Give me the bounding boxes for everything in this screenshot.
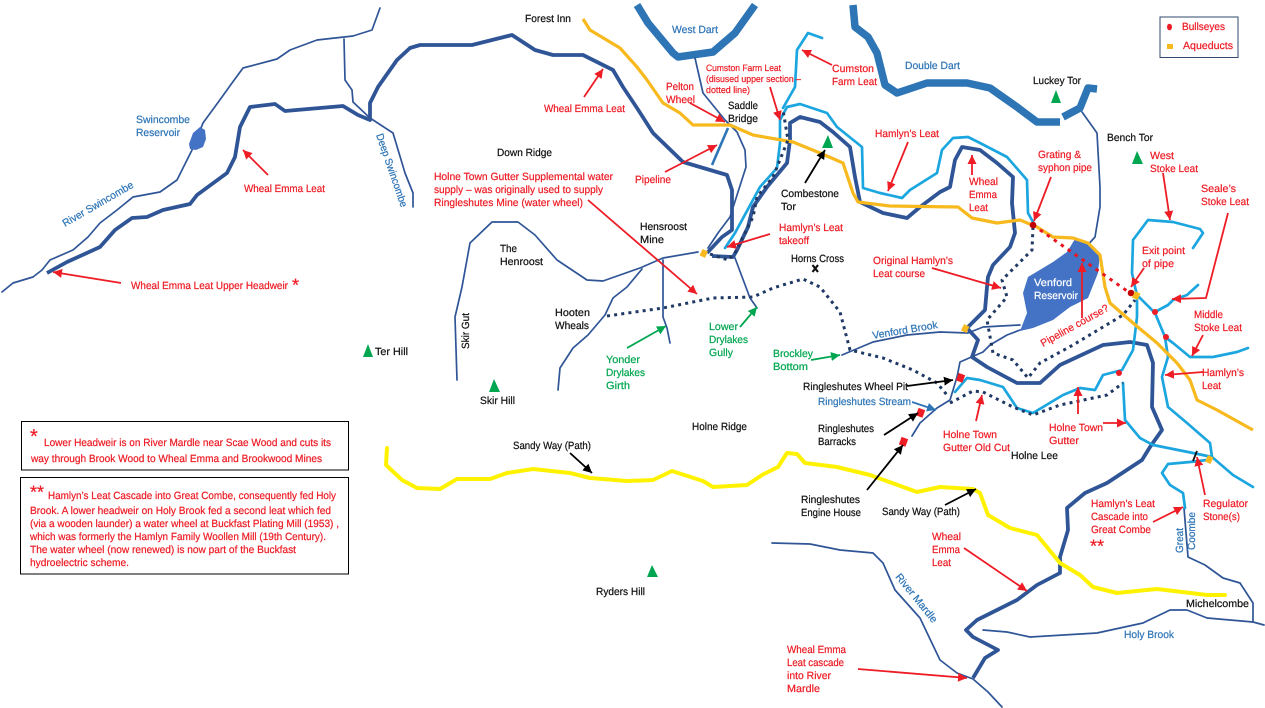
label: Hamlyn's Leat Cascade into Great Combe: Cascade into bbox=[1091, 511, 1148, 523]
label: Brockley Bottom: Bottom bbox=[773, 361, 808, 373]
dotted: Cumston Farm Leat disused bbox=[710, 110, 788, 260]
arrow: Cascade Great Combe bbox=[1153, 507, 1183, 522]
arrow: Sandy Way east bbox=[945, 489, 976, 505]
label: Holy Brook: Holy Brook bbox=[1124, 629, 1175, 641]
label: Swincombe Reservoir bbox=[136, 114, 190, 139]
label: Great Coombe: Great bbox=[1174, 528, 1186, 553]
note box: Hamlyn's Leat cascade: (via a wooden launder) a water wheel at Buckfast Plating Mill (1953) , bbox=[30, 518, 339, 530]
hill marker: Bench Tor bbox=[1132, 151, 1143, 164]
label: West Stoke Leat: Stoke Leat bbox=[1150, 163, 1198, 175]
label: Bench Tor: Bench Tor bbox=[1107, 132, 1153, 144]
stream: Ringleshutes Stream bbox=[912, 330, 1020, 436]
label: Exit point of pipe: of pipe bbox=[1142, 258, 1174, 270]
label: Holne Town Gutter Old Cut: Holne Town bbox=[943, 429, 997, 441]
label: Great Coombe bbox=[1174, 512, 1198, 553]
arrow: Sandy Way west bbox=[570, 453, 592, 473]
label: Hamlyn's Leat Cascade into Great Combe: Hamlyn’s Leat bbox=[1091, 498, 1155, 510]
label: Venford Reservoir bbox=[1034, 277, 1078, 302]
stream: Venford Brook bbox=[842, 325, 1020, 355]
dotted: Holne Town Gutter supplemental supply bbox=[607, 279, 947, 395]
stream: River Mardle bbox=[772, 543, 1002, 707]
arrow: Hamlyn's takeoff bbox=[727, 234, 770, 247]
label: Combestone Tor: Tor bbox=[781, 201, 797, 213]
label: Wheal Emma Leat south: Leat bbox=[932, 557, 951, 569]
label: Holne Ridge: Holne Ridge bbox=[692, 421, 747, 433]
arrow: Old Cut bbox=[976, 395, 982, 421]
bullseye: Seale's bbox=[1152, 309, 1158, 315]
aqueduct: regulator bbox=[1205, 455, 1213, 464]
stream: Lower Drylakes Gully bbox=[735, 258, 757, 308]
label: Luckey Tor: Luckey Tor bbox=[1033, 75, 1081, 87]
label: Yonder Drylakes Girth bbox=[606, 354, 645, 392]
label: Ringleshutes Engine House bbox=[801, 494, 861, 519]
label: Wheal Emma Leat centre bbox=[969, 176, 998, 214]
aqueduct line bbox=[583, 19, 1253, 430]
label: Wheal Emma Leat south bbox=[932, 531, 961, 569]
arrow: Cascade River Mardle bbox=[858, 669, 967, 678]
label: Venford Reservoir: Reservoir bbox=[1034, 290, 1078, 302]
arrow: Holne Town Gutter Supplemental bbox=[588, 200, 697, 294]
label: Swincombe Reservoir: Reservoir bbox=[136, 127, 180, 139]
label: Saddle Bridge: Saddle bbox=[728, 100, 758, 112]
label: Hamlyn's Leat takeoff: Hamlyn’s Leat bbox=[779, 222, 843, 234]
label: Wheal Emma Leat Upper Headweir: * bbox=[292, 275, 299, 295]
label: Wheal Emma Leat cascade into River Mardle: Wheal Emma bbox=[787, 644, 846, 656]
hill marker: Skir Hill bbox=[489, 379, 500, 392]
label: Saddle Bridge bbox=[728, 100, 758, 125]
label: Ter Hill: Ter Hill bbox=[375, 346, 408, 358]
reservoir: Venford Reservoir bbox=[1020, 239, 1100, 331]
river: West Dart bbox=[637, 5, 755, 57]
pipeline to Pelton Wheel bbox=[712, 128, 728, 165]
label: Middle Stoke Leat bbox=[1194, 309, 1242, 334]
label: Cumston Farm Leat disused: Cumston Farm Leat bbox=[706, 63, 781, 73]
stream: Yonder Drylakes Girth bbox=[663, 260, 670, 343]
leat: Hamlyn's Leat cascade bbox=[1162, 460, 1207, 508]
label: Ringleshutes Barracks: Ringleshutes bbox=[818, 423, 874, 435]
label: Holne Town Gutter Supplemental: Ringleshutes Mine (water wheel) bbox=[434, 197, 583, 209]
label: Holne Town Gutter: Gutter bbox=[1049, 435, 1080, 447]
arrow: Hamlyn's Leat east bbox=[1165, 372, 1203, 375]
leat: West Stoke Leat bbox=[1132, 220, 1203, 295]
note box: Hamlyn's Leat cascade: The water wheel (now renewed) is now part of the Buckfast bbox=[30, 544, 296, 556]
label: Venford Reservoir: Venford bbox=[1034, 277, 1072, 289]
label: Ringleshutes Stream: Ringleshutes Stream bbox=[818, 396, 911, 408]
label: The Henroost bbox=[500, 243, 543, 268]
arrow: Lower Drylakes bbox=[740, 307, 757, 327]
label: Cumston Farm Leat: Farm Leat bbox=[832, 76, 877, 88]
hill marker: Luckey Tor bbox=[1051, 90, 1061, 103]
arrow: Wheal Emma Leat south bbox=[964, 548, 1027, 591]
bullseye: grating bbox=[1030, 222, 1036, 228]
label: Seale's Stoke Leat: Seale’s bbox=[1201, 183, 1236, 195]
label: Sandy Way west: Sandy Way (Path) bbox=[513, 440, 591, 452]
label: Lower Drylakes Gully bbox=[709, 321, 748, 359]
label: Seale's Stoke Leat bbox=[1201, 183, 1249, 208]
label: Grating and syphon pipe: syphon pipe bbox=[1038, 162, 1092, 174]
label: Double Dart: Double Dart bbox=[905, 60, 960, 72]
label: Holne Town Gutter Supplemental: supply – was originally used to supply bbox=[434, 184, 604, 196]
label: Original Hamlyn's Leat course: Leat course bbox=[873, 268, 925, 280]
label: Middle Stoke Leat: Stoke Leat bbox=[1194, 322, 1242, 334]
label: Ringleshutes Wheel Pit: Ringleshutes Wheel Pit bbox=[803, 381, 908, 393]
leat: Wheal Emma Leat western section bbox=[47, 35, 732, 273]
label: West Stoke Leat: West bbox=[1150, 150, 1174, 162]
label: Wheal Emma Leat south: Wheal bbox=[932, 531, 961, 543]
leat: Cumston Farm Leat upper bbox=[783, 33, 822, 108]
label: Ringleshutes Engine House: Engine House bbox=[801, 507, 861, 519]
arrow: Grating bbox=[1034, 177, 1051, 221]
aqueduct: exit point bbox=[1132, 291, 1140, 300]
label: Holne Town Gutter bbox=[1049, 422, 1103, 447]
label: The Henroost: Henroost bbox=[500, 256, 543, 268]
stream: from West Dart through Saddle Bridge bbox=[695, 58, 746, 248]
bullseye: exit point bbox=[1128, 290, 1134, 296]
leat: Middle Stoke Leat bbox=[1165, 337, 1248, 357]
label: River Swincombe: River Swincombe bbox=[60, 179, 136, 230]
label: Hamlyn's Leat takeoff bbox=[779, 222, 843, 247]
dotted: original Hamlyn's Leat course bbox=[987, 227, 1135, 378]
label: Saddle Bridge: Bridge bbox=[728, 113, 758, 125]
label: Hamlyn's Leat east: Leat bbox=[1202, 380, 1221, 392]
label: Hensroost Mine: Hensroost bbox=[640, 221, 687, 233]
aqueduct: Hensroost bbox=[700, 249, 708, 258]
note box: Hamlyn's Leat cascade: ** bbox=[30, 482, 44, 502]
leat: Holne Town Gutter lower bbox=[1123, 383, 1253, 487]
label: Hooten Wheals: Wheals bbox=[555, 320, 589, 332]
label: Forest Inn: Forest Inn bbox=[525, 13, 571, 25]
arrow: Ringleshutes Stream bbox=[912, 402, 936, 410]
arrow: Brockley Bottom bbox=[811, 355, 840, 360]
hill marker: Combestone Tor bbox=[822, 135, 833, 148]
note box: lower headweir: way through Brook Wood to Wheal Emma and Brookwood Mines bbox=[30, 453, 322, 465]
dotted: Holne Town Gutter Old Cut bbox=[950, 383, 1123, 415]
label: Holne Town Gutter Supplemental bbox=[434, 171, 613, 209]
label: Lower Drylakes Gully: Gully bbox=[709, 347, 734, 359]
label: Yonder Drylakes Girth: Girth bbox=[606, 380, 630, 392]
arrow: Middle Stoke Leat bbox=[1192, 335, 1203, 356]
label: Michelcombe: Michelcombe bbox=[1186, 598, 1249, 610]
note box: lower headweir: Lower Headweir is on River Mardle near Scae Wood and cuts its bbox=[44, 437, 331, 449]
note box: Hamlyn's Leat cascade: hydroelectric scheme. bbox=[30, 557, 129, 569]
note box: Hamlyn's Leat cascade bbox=[20, 478, 348, 574]
label: Hamlyn's Leat east: Hamlyn’s bbox=[1202, 367, 1244, 379]
arrow: Wheal Emma Leat Forest Inn bbox=[584, 69, 603, 97]
label: Combestone Tor: Combestone bbox=[781, 188, 839, 200]
label: Yonder Drylakes Girth: Drylakes bbox=[606, 367, 645, 379]
label: Hooten Wheals: Hooten bbox=[555, 307, 590, 319]
label: Wheal Emma Leat centre: Emma bbox=[969, 189, 997, 201]
label: Original Hamlyn's Leat course: Original Hamlyn’s bbox=[873, 255, 953, 267]
label: Cumston Farm Leat: Cumston bbox=[832, 63, 874, 75]
label: Hooten Wheals bbox=[555, 307, 590, 332]
label: Wheal Emma Leat cascade into River Mardle: Leat cascade bbox=[787, 657, 844, 669]
aqueduct: Venford Brook bbox=[961, 324, 969, 333]
leat: Holne Town Gutter bbox=[955, 295, 1137, 413]
label: Hamlyn's Leat east bbox=[1202, 367, 1244, 392]
note box: Hamlyn's Leat cascade: Hamlyn’s Leat Cascade into Great Combe, consequently fed Holy bbox=[48, 490, 337, 502]
label: Hensroost Mine: Mine bbox=[640, 234, 664, 246]
label: Cumston Farm Leat disused bbox=[706, 63, 802, 95]
arrow: Wheel Pit bbox=[907, 380, 953, 386]
label: Hamlyn's Leat takeoff: takeoff bbox=[779, 235, 809, 247]
path: Sandy Way bbox=[386, 448, 1225, 595]
arrow: Wheal Emma Leat west bbox=[243, 150, 268, 175]
label: Holne Town Gutter Old Cut bbox=[943, 429, 1010, 454]
marker: Ringleshutes Engine House bbox=[899, 437, 908, 447]
label: Wheal Emma Leat cascade into River Mardle bbox=[787, 644, 846, 695]
river: Double Dart bbox=[853, 5, 1097, 122]
arrow: Cumston disused bbox=[770, 87, 780, 120]
arrow: upper headweir bbox=[53, 272, 121, 283]
label: Grating and syphon pipe bbox=[1038, 149, 1092, 174]
stream: Holy Brook bbox=[983, 610, 1264, 637]
label: Skir Hill: Skir Hill bbox=[480, 395, 515, 407]
label: Regulator Stone(s) bbox=[1203, 498, 1248, 523]
label: Wheal Emma Leat Upper Headweir: Wheal Emma Leat Upper Headweir bbox=[131, 280, 288, 292]
label: Skir Gut: Skir Gut bbox=[460, 313, 472, 349]
leat: Seale's Stoke Leat bbox=[1155, 285, 1198, 312]
hill marker: Ryders Hill bbox=[647, 565, 658, 577]
river: Deep Swincombe bbox=[344, 39, 413, 207]
stream: from Double Dart to Venford Reservoir bbox=[1082, 112, 1100, 248]
dotted: pipeline course bbox=[1033, 225, 1130, 293]
label: Cumston Farm Leat disused: dotted line) bbox=[706, 85, 750, 95]
label: Horns Cross: Horns Cross bbox=[791, 253, 844, 265]
label: Pelton Wheel: Pelton bbox=[666, 81, 694, 93]
note box: lower headweir: * bbox=[30, 426, 38, 448]
arrow: Regulator Stone bbox=[1197, 457, 1205, 495]
label: Pipeline: Pipeline bbox=[635, 174, 671, 186]
label: Lower Drylakes Gully: Lower bbox=[709, 321, 738, 333]
arrow: Yonder Drylakes bbox=[627, 326, 666, 348]
note box: Hamlyn's Leat cascade: which was formerly the Hamlyn Family Woollen Mill (19th Century). bbox=[29, 531, 326, 543]
arrow: Seale's Stoke Leat bbox=[1172, 213, 1228, 299]
leat: Wheal Emma Leat eastern section bbox=[712, 117, 1162, 678]
note box: lower headweir bbox=[22, 422, 348, 470]
label: Hamlyn's Leat Cascade into Great Combe bbox=[1090, 498, 1155, 556]
label: Combestone Tor bbox=[781, 188, 839, 213]
leat: Hamlyn's Leat bbox=[725, 104, 1033, 248]
marker: Ringleshutes Barracks bbox=[916, 408, 925, 418]
label: Wheal Emma Leat centre: Wheal bbox=[969, 176, 998, 188]
label: Deep Swincombe: Deep Swincombe bbox=[373, 132, 410, 209]
label: Exit point of pipe: Exit point bbox=[1142, 245, 1185, 257]
arrow: Pipeline course bbox=[1081, 263, 1083, 318]
hill marker: Ter Hill bbox=[363, 344, 373, 357]
marker: Ringleshutes Wheel Pit bbox=[956, 373, 965, 383]
arrow: Original Hamlyn's bbox=[932, 268, 1001, 288]
arrow: Cumston Farm Leat bbox=[802, 50, 832, 65]
stream: Skir Gut and The Henroost bbox=[455, 222, 698, 380]
label: Regulator Stone(s): Regulator bbox=[1203, 498, 1248, 510]
label: Wheal Emma Leat Upper Headweir bbox=[131, 275, 299, 295]
label: The Henroost: The bbox=[500, 243, 517, 255]
label: Ringleshutes Barracks bbox=[818, 423, 874, 448]
label: West Stoke Leat bbox=[1150, 150, 1198, 175]
legend bbox=[1160, 17, 1238, 58]
arrow: Exit point bbox=[1131, 268, 1144, 287]
reservoir: Swincombe Reservoir bbox=[189, 127, 206, 150]
label: Hamlyn's Leat north: Hamlyn’s Leat bbox=[875, 128, 939, 140]
label: Holne Town Gutter Supplemental: Holne Town Gutter Supplemental water bbox=[434, 171, 613, 183]
label: Hamlyn's Leat Cascade into Great Combe: ** bbox=[1090, 536, 1104, 556]
label: Wheal Emma Leat west: Wheal Emma Leat bbox=[244, 183, 325, 195]
arrow: Barracks bbox=[884, 413, 918, 435]
regulator stone tick bbox=[1193, 451, 1197, 461]
label: West Dart: West Dart bbox=[672, 24, 718, 36]
arrow: Wheal Emma Leat centre bbox=[971, 155, 973, 175]
river: River Swincombe bbox=[2, 8, 380, 292]
arrow: Engine House bbox=[867, 445, 903, 490]
label: Brockley Bottom bbox=[773, 348, 814, 373]
label: Cumston Farm Leat bbox=[832, 63, 877, 88]
leat: Seale's and Hamlyn's lower bbox=[1137, 295, 1212, 457]
label: Middle Stoke Leat: Middle bbox=[1194, 309, 1223, 321]
label: Grating and syphon pipe: Grating & bbox=[1038, 149, 1081, 161]
arrow: Pipeline bbox=[665, 145, 717, 172]
label: Brockley Bottom: Brockley bbox=[773, 348, 814, 360]
arrow: West Stoke Leat bbox=[1163, 173, 1170, 220]
stream: Hooten Wheals bbox=[558, 269, 642, 390]
label: Hamlyn's Leat Cascade into Great Combe: Great Combe bbox=[1091, 524, 1151, 536]
label: Regulator Stone(s): Stone(s) bbox=[1203, 511, 1240, 523]
label: Seale's Stoke Leat: Stoke Leat bbox=[1201, 196, 1249, 208]
label: Holne Town Gutter: Holne Town bbox=[1049, 422, 1103, 434]
label: Holne Lee: Holne Lee bbox=[1011, 450, 1058, 462]
label: Great Coombe: Coombe bbox=[1186, 512, 1198, 550]
legend: Aqueducts bbox=[1183, 40, 1233, 52]
arrow: Hamlyn's Leat bbox=[888, 142, 908, 191]
label: Venford Brook: Venford Brook bbox=[871, 319, 939, 342]
label: Exit point of pipe bbox=[1142, 245, 1185, 270]
label: Ryders Hill: Ryders Hill bbox=[596, 586, 645, 598]
bullseye: Middle Stoke bbox=[1163, 334, 1169, 340]
label: Yonder Drylakes Girth: Yonder bbox=[606, 354, 641, 366]
label: Swincombe Reservoir: Swincombe bbox=[136, 114, 190, 126]
arrow: Combestone Tor bbox=[805, 150, 825, 183]
label: Pipeline course: Pipeline course? bbox=[1039, 302, 1111, 350]
label: Hensroost Mine bbox=[640, 221, 687, 246]
label: Down Ridge: Down Ridge bbox=[497, 147, 552, 159]
note box: Hamlyn's Leat cascade: Brook. A lower headweir on Holy Brook fed a second leat which fed bbox=[30, 505, 331, 517]
icon: Horns Cross bbox=[812, 265, 818, 272]
label: Holne Town Gutter Old Cut: Gutter Old Cut bbox=[943, 442, 1010, 454]
label: Lower Drylakes Gully: Drylakes bbox=[709, 334, 748, 346]
label: River Mardle: River Mardle bbox=[893, 571, 940, 626]
label: Pelton Wheel bbox=[666, 81, 695, 106]
label: Cumston Farm Leat disused: (disused upper section – bbox=[706, 74, 802, 84]
label: Sandy Way east: Sandy Way (Path) bbox=[882, 506, 960, 518]
legend: Bullseyes bbox=[1182, 21, 1225, 33]
stream: Great Coombe bbox=[1184, 508, 1253, 622]
label: Wheal Emma Leat north: Wheal Emma Leat bbox=[544, 103, 625, 115]
label: Wheal Emma Leat south: Emma bbox=[932, 544, 960, 556]
label: Ringleshutes Engine House: Ringleshutes bbox=[801, 494, 860, 506]
label: Wheal Emma Leat cascade into River Mardle: Mardle bbox=[787, 683, 820, 695]
arrow: Holne Town Gutter right bbox=[1103, 422, 1126, 424]
label: Ringleshutes Barracks: Barracks bbox=[818, 436, 856, 448]
label: Pelton Wheel: Wheel bbox=[666, 94, 695, 106]
label: Wheal Emma Leat cascade into River Mardle: into River bbox=[787, 670, 831, 682]
label: Original Hamlyn's Leat course bbox=[873, 255, 953, 280]
arrow: Pelton Wheel bbox=[690, 103, 725, 122]
bullseye: Holne Town Gutter bbox=[1116, 370, 1122, 376]
label: Wheal Emma Leat centre: Leat bbox=[969, 202, 988, 214]
arrow: Holne Town Gutter up bbox=[1077, 387, 1079, 414]
